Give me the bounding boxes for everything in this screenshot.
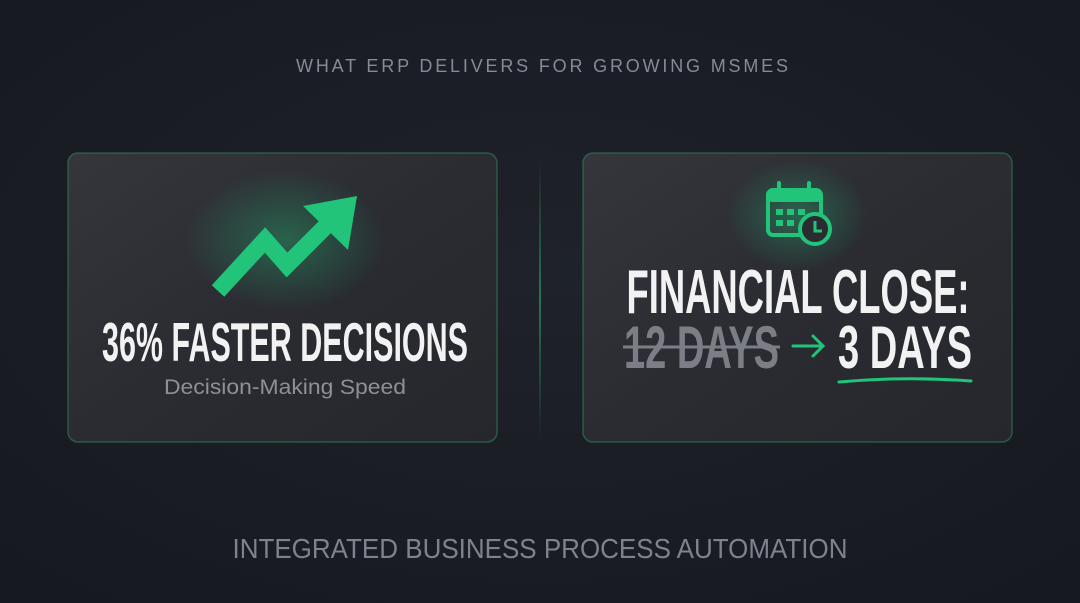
subtitle: Decision-Making Speed <box>164 376 406 399</box>
divider <box>539 158 541 440</box>
icon: trend arrow <box>185 170 385 310</box>
panel: financial close <box>583 153 1012 442</box>
footer: INTEGRATED BUSINESS PROCESS AUTOMATION <box>232 533 848 564</box>
new value: 3 days <box>838 314 972 382</box>
arrow <box>793 336 823 356</box>
new value: 3 days: 3 DAYS <box>838 314 972 381</box>
panel: decisions <box>68 153 497 442</box>
old value: 12 days: 12 DAYS <box>624 314 779 381</box>
headline: 36% faster decisions: 36% FASTER DECISIONS <box>102 311 468 373</box>
header: WHAT ERP DELIVERS FOR GROWING MSMES <box>296 56 788 76</box>
icon: calendar clock <box>727 160 867 270</box>
